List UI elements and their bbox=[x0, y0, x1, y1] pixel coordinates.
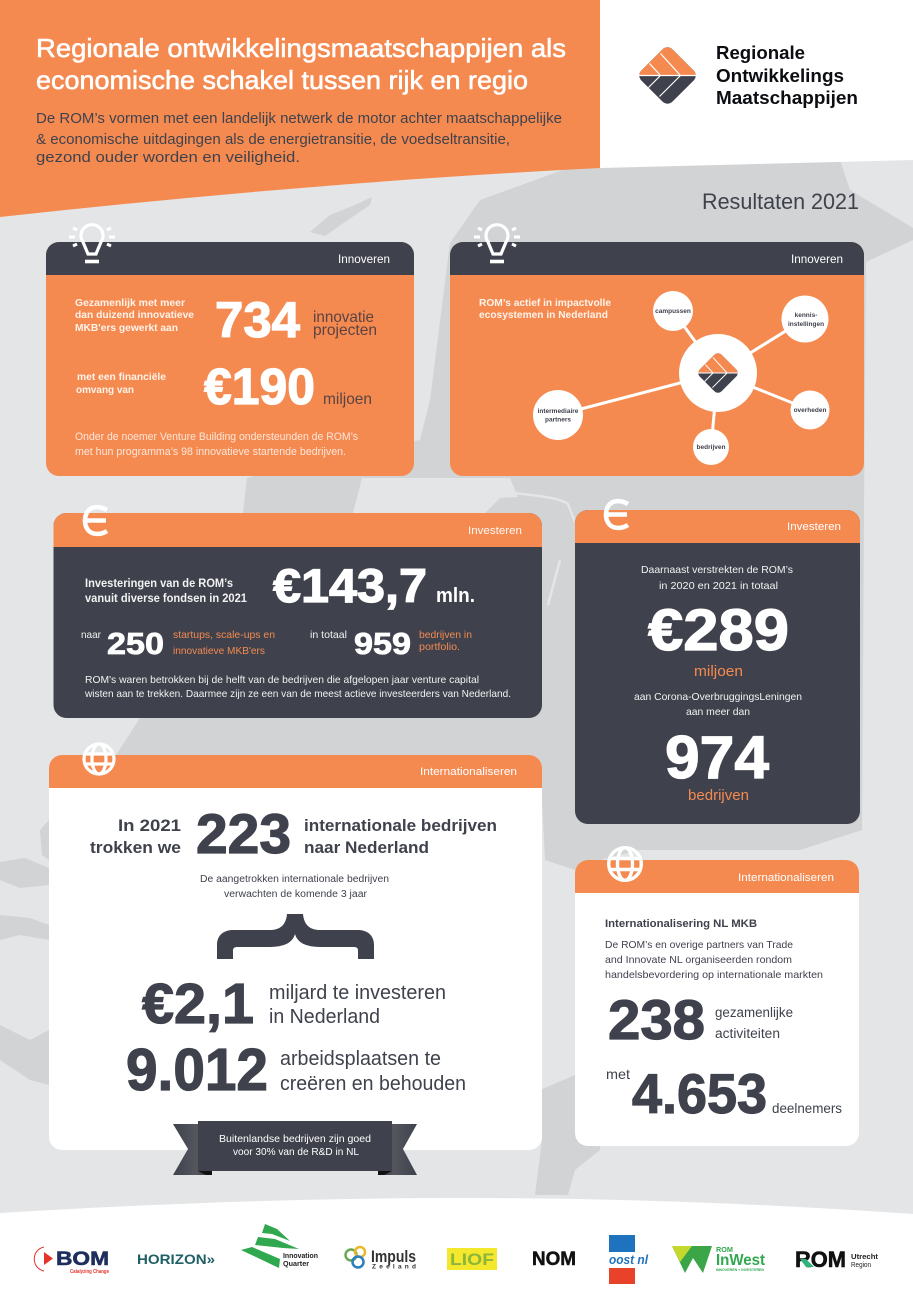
white logo panel bbox=[600, 46, 913, 168]
icon: globe bbox=[609, 848, 641, 880]
text: ecosystems: ROM’s actief in impactvolle bbox=[479, 297, 611, 309]
text: portfolio: portfolio. bbox=[419, 641, 460, 653]
label: Innoveren bbox=[791, 254, 843, 266]
text: description bbox=[605, 939, 823, 981]
intro paragraph bbox=[36, 110, 562, 166]
title: economische schakel tussen rijk en regio bbox=[36, 65, 528, 95]
text: naar: naar bbox=[81, 629, 101, 641]
logo wordmark: Regionale bbox=[716, 43, 805, 63]
text: R&D bbox=[219, 1133, 371, 1158]
number: 4.653: 4.653 bbox=[632, 1062, 767, 1125]
label: Investeren bbox=[468, 525, 522, 537]
icon: light bulb bbox=[69, 225, 115, 262]
logo: Impuls Zeeland: Impuls bbox=[371, 1247, 416, 1266]
text: met: met bbox=[606, 1066, 630, 1082]
logo: ROM Utrecht Region: Utrecht bbox=[851, 1252, 879, 1261]
logo: ROM InWest: INNOVEREN + INVESTEREN bbox=[716, 1268, 764, 1272]
icon: euro bbox=[606, 501, 628, 528]
text: corona bbox=[634, 691, 802, 718]
node labels: bedrijven bbox=[697, 444, 725, 451]
icon: globe bbox=[84, 744, 114, 774]
logo: ROM InWest: InWest bbox=[716, 1252, 766, 1269]
text: heading: Internationalisering NL MKB bbox=[605, 918, 757, 930]
icon: ROM logo bbox=[698, 353, 738, 393]
text: innovatie projecten bbox=[313, 309, 377, 339]
text: intro: in 2020 en 2021 in totaal bbox=[659, 580, 778, 592]
node labels: intermediaire bbox=[538, 408, 579, 415]
number: 2,1 billion: €2,1 bbox=[142, 972, 254, 1036]
text: startups: startups, scale-ups en bbox=[173, 629, 275, 641]
number: 223: 223 bbox=[196, 802, 291, 865]
logo: Oost NL: oost nl bbox=[609, 1252, 648, 1267]
panel: investeren funds bbox=[54, 507, 542, 718]
text: venture capital: wisten aan te trekken. Daarmee zijn ze een van de meest actieve investeerders van Nederland. bbox=[84, 688, 511, 700]
footer band bbox=[0, 1198, 913, 1291]
number: 734: 734 bbox=[215, 292, 300, 348]
number: 289: €289 bbox=[648, 598, 789, 663]
text: invest bbox=[269, 982, 446, 1028]
text: ecosystems: ecosystemen in Nederland bbox=[479, 309, 608, 321]
heading: results: Resultaten 2021 bbox=[702, 189, 859, 214]
text: expectation: De aangetrokken internationale bedrijven bbox=[200, 874, 389, 885]
text: venture capital bbox=[84, 674, 511, 700]
header banner bbox=[0, 0, 600, 217]
text: bedrijven: bedrijven bbox=[688, 787, 749, 804]
logo: NOM: NOM bbox=[532, 1249, 576, 1270]
node labels: instellingen bbox=[788, 321, 824, 328]
text: international companies: naar Nederland bbox=[304, 838, 429, 857]
logo: Innovation Quarter: Innovation bbox=[283, 1251, 318, 1260]
icon: light bulb bbox=[474, 225, 520, 262]
logo: ROM InWest bbox=[672, 1245, 766, 1273]
node labels: partners bbox=[545, 416, 571, 424]
panel: innoveren ecosystems bbox=[450, 225, 864, 476]
label: Innoveren bbox=[338, 254, 390, 266]
logo: ROM Utrecht Region: ROM bbox=[795, 1247, 846, 1272]
text: participants: deelnemers bbox=[772, 1100, 842, 1116]
text: partners bbox=[75, 297, 194, 334]
logo: Innovation Quarter bbox=[241, 1224, 318, 1268]
intro paragraph: De ROM’s vormen met een landelijk netwerk de motor achter maatschappelijke bbox=[36, 110, 562, 127]
text: financial bbox=[76, 371, 166, 396]
text: miljoen: miljoen bbox=[694, 663, 743, 680]
label: Internationaliseren bbox=[420, 766, 517, 778]
number: 250: 250 bbox=[107, 626, 164, 661]
text: description: De ROM’s en overige partners van Trade bbox=[605, 939, 793, 951]
number: 190 million: €190 bbox=[204, 358, 315, 415]
number: 238: 238 bbox=[608, 988, 705, 1051]
logo: Impuls Zeeland: Zeeland bbox=[372, 1264, 416, 1270]
logo: BOM: BOM bbox=[56, 1249, 109, 1270]
text: R&D: voor 30% van de R&D in NL bbox=[233, 1146, 359, 1158]
text: description: and Innovate NL organiseerden rondom bbox=[605, 954, 792, 966]
text: investments: vanuit diverse fondsen in 2021 bbox=[85, 593, 248, 605]
text: jobs: creëren en behouden bbox=[280, 1073, 466, 1095]
text: innovatie projecten: projecten bbox=[313, 322, 377, 339]
node labels: overheden bbox=[794, 407, 826, 414]
text: ecosystems bbox=[479, 297, 611, 321]
intro paragraph: gezond ouder worden en veiligheid. bbox=[36, 149, 300, 166]
label: Internationaliseren bbox=[738, 872, 834, 884]
node labels: campussen bbox=[655, 308, 691, 315]
panel: investeren corona loans bbox=[575, 501, 860, 824]
text: international companies: internationale bedrijven bbox=[304, 816, 497, 835]
logo: LIOF bbox=[447, 1248, 497, 1270]
text: invest: miljard te investeren bbox=[269, 982, 446, 1004]
text: activities: gezamenlijke bbox=[715, 1005, 793, 1020]
logo wordmark: Ontwikkelings bbox=[716, 66, 844, 86]
panel: internationaliseren MKB bbox=[575, 848, 859, 1146]
text: description: handelsbevordering op internationale markten bbox=[605, 969, 823, 981]
text: venture building bbox=[75, 431, 358, 458]
text: activities: activiteiten bbox=[715, 1026, 780, 1041]
title bbox=[36, 33, 566, 95]
node labels bbox=[538, 308, 826, 451]
logo wordmark: Maatschappijen bbox=[716, 88, 858, 108]
text: miljoen: miljoen bbox=[323, 391, 372, 408]
panel: internationaliseren attraction bbox=[49, 744, 542, 1150]
network diagram bbox=[533, 291, 830, 465]
text: intro: Daarnaast verstrekten de ROM’s bbox=[641, 564, 793, 576]
text: portfolio: bedrijven in bbox=[419, 629, 472, 641]
text: expectation bbox=[200, 874, 389, 900]
text: intro bbox=[641, 564, 793, 592]
text: mln: mln. bbox=[436, 585, 475, 607]
icon: curly brace bbox=[217, 914, 374, 959]
number: 959: 959 bbox=[354, 626, 411, 661]
logo: Oost NL bbox=[609, 1235, 648, 1284]
text: partners: Gezamenlijk met meer bbox=[75, 297, 185, 309]
text: partners: dan duizend innovatieve bbox=[75, 309, 194, 321]
logo: Impuls Zeeland bbox=[346, 1247, 416, 1270]
text: investments bbox=[85, 578, 248, 605]
logo: ROM Utrecht Region bbox=[795, 1247, 879, 1272]
number: 974: 974 bbox=[665, 724, 770, 791]
text: portfolio bbox=[419, 629, 472, 653]
text: startups: innovatieve MKB'ers bbox=[173, 645, 265, 657]
text: in totaal: in totaal bbox=[310, 629, 347, 641]
logo wordmark bbox=[716, 43, 858, 108]
text: corona: aan Corona-OverbruggingsLeningen bbox=[634, 691, 802, 703]
text: jobs: arbeidsplaatsen te bbox=[280, 1048, 441, 1070]
text: startups bbox=[173, 629, 275, 657]
text: venture capital: ROM's waren betrokken bij de helft van de bedrijven die afgelopen jaar venture capital bbox=[85, 674, 479, 686]
text: international companies bbox=[304, 816, 497, 857]
text: in 2021: In 2021 bbox=[118, 816, 181, 835]
logo: Horizon: HORIZON» bbox=[137, 1251, 215, 1267]
logo: Innovation Quarter: Quarter bbox=[283, 1259, 309, 1268]
text: jobs bbox=[280, 1048, 466, 1095]
text: venture building: Onder de noemer Venture Building ondersteunden de ROM’s bbox=[75, 431, 358, 443]
text: expectation: verwachten de komende 3 jaar bbox=[224, 889, 368, 900]
panel: innoveren projects bbox=[46, 225, 414, 476]
logo: ROM Utrecht Region: Region bbox=[851, 1260, 871, 1269]
logo: BOM bbox=[34, 1247, 109, 1275]
logo: ROM InWest: ROM bbox=[716, 1245, 733, 1254]
title: Regionale ontwikkelingsmaatschappijen als bbox=[36, 33, 566, 63]
icon: euro bbox=[85, 507, 107, 534]
text: financial: omvang van bbox=[76, 384, 134, 396]
number: 143,7: €143,7 bbox=[273, 559, 427, 612]
text: invest: in Nederland bbox=[269, 1006, 380, 1028]
number: 9.012: 9.012 bbox=[126, 1037, 268, 1103]
text: in 2021: trokken we bbox=[90, 838, 181, 857]
text: innovatie projecten: innovatie bbox=[313, 309, 374, 326]
node labels: kennis- bbox=[795, 312, 817, 319]
ribbon callout bbox=[173, 1121, 417, 1175]
intro paragraph: & economische uitdagingen als de energietransitie, de voedseltransitie, bbox=[36, 131, 510, 148]
text: venture building: met hun programma’s 98 innovatieve startende bedrijven. bbox=[75, 446, 346, 458]
icon: ROM logo bbox=[639, 47, 696, 104]
text: corona: aan meer dan bbox=[686, 706, 750, 718]
logo: LIOF: LIOF bbox=[450, 1250, 494, 1269]
text: financial: met een financiële bbox=[77, 371, 166, 383]
text: R&D: Buitenlandse bedrijven zijn goed bbox=[219, 1133, 371, 1145]
label: Investeren bbox=[787, 521, 841, 533]
text: partners: MKB'ers gewerkt aan bbox=[75, 322, 178, 334]
logo: BOM: Catalyzing Change bbox=[70, 1269, 109, 1275]
text: investments: Investeringen van de ROM’s bbox=[85, 578, 233, 590]
text: activities bbox=[715, 1005, 793, 1041]
text: in 2021 bbox=[90, 816, 181, 857]
